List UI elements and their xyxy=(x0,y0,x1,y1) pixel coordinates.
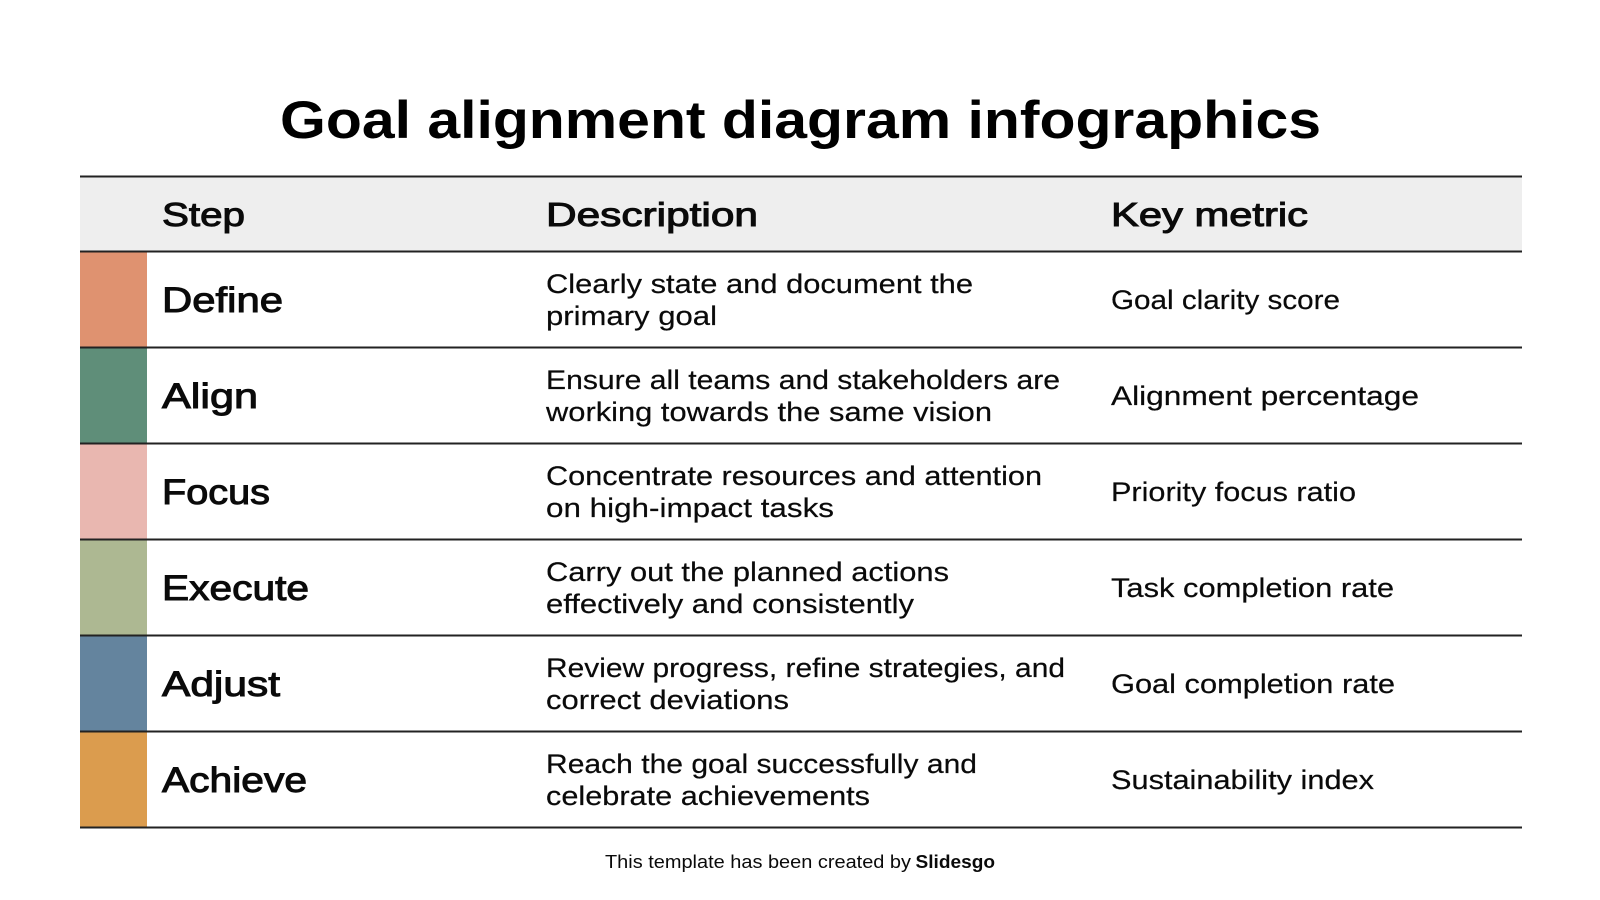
row: Align: Align xyxy=(162,377,258,416)
header row: Description xyxy=(546,196,758,233)
row: Execute: effectively and consistently xyxy=(546,589,915,619)
row: Achieve: Achieve xyxy=(162,761,307,800)
footer credit: Slidesgo xyxy=(916,852,995,872)
row: Execute: Carry out the planned actions xyxy=(546,557,949,587)
row: Adjust: Goal completion rate xyxy=(1111,669,1395,699)
row: Define: Goal clarity score xyxy=(1111,285,1340,315)
row: Achieve: Sustainability index xyxy=(1111,765,1374,795)
footer credit: This template has been created by xyxy=(605,852,911,872)
row: Define: Clearly state and document the xyxy=(546,269,973,299)
row: Define: Define xyxy=(162,281,283,320)
header row: Step xyxy=(162,196,245,233)
row: Align: Ensure all teams and stakeholders are xyxy=(546,365,1060,395)
row: Adjust: Adjust xyxy=(162,665,280,704)
table xyxy=(80,176,1522,828)
row: Adjust: Review progress, refine strategies, and xyxy=(546,653,1065,683)
row: Adjust xyxy=(80,635,1395,731)
row: Define xyxy=(80,251,1340,347)
row: Execute: Task completion rate xyxy=(1111,573,1394,603)
row: Focus: Concentrate resources and attention xyxy=(546,461,1042,491)
row: Achieve xyxy=(80,731,1374,827)
row: Achieve: celebrate achievements xyxy=(546,781,870,811)
row: Execute: Execute xyxy=(162,569,309,608)
row: Execute xyxy=(80,539,1394,635)
header row xyxy=(80,176,1522,251)
row: Focus: Focus xyxy=(162,473,270,512)
row: Define: primary goal xyxy=(546,301,717,331)
row: Align: Alignment percentage xyxy=(1111,381,1419,411)
row: Focus xyxy=(80,443,1356,539)
header row: Key metric xyxy=(1111,196,1308,233)
row: Adjust: correct deviations xyxy=(546,685,789,715)
row: Focus: on high-impact tasks xyxy=(546,493,834,523)
row: Align xyxy=(80,347,1419,443)
row: Achieve: Reach the goal successfully and xyxy=(546,749,977,779)
row: Align: working towards the same vision xyxy=(545,397,992,427)
title: Goal alignment diagram infographics xyxy=(280,91,1321,150)
row: Focus: Priority focus ratio xyxy=(1111,477,1356,507)
